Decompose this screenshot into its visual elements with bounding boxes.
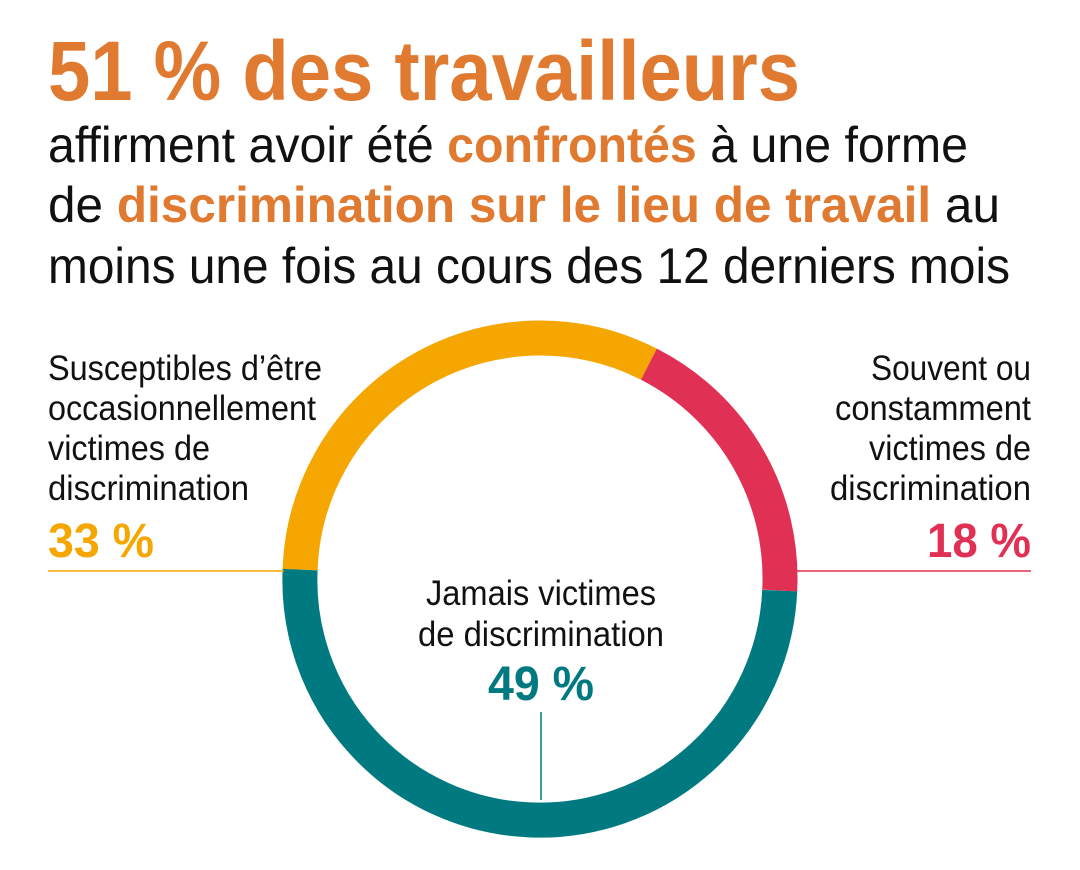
label: often: [830, 349, 1031, 568]
label: occasionally: discrimination: [48, 469, 249, 508]
leader line left: [48, 570, 284, 572]
label: occasionally: 33 %: [48, 515, 154, 568]
label: occasionally: Susceptibles d’être: [48, 349, 322, 388]
label: occasionally: victimes de: [48, 429, 210, 468]
donut chart: [300, 338, 780, 820]
label: occasionally: occasionnellement: [48, 389, 316, 428]
label: often: victimes de: [869, 429, 1031, 468]
label: never: [418, 574, 664, 711]
title: 51 % des travailleurs: [48, 24, 800, 118]
label: never: 49 %: [488, 658, 594, 711]
label: never: de discrimination: [418, 615, 664, 654]
label: often: discrimination: [830, 469, 1031, 508]
label: often: Souvent ou: [871, 349, 1031, 388]
leader line right: [797, 570, 1031, 572]
subtitle text block: moins une fois au cours des 12 derniers mois: [48, 238, 1010, 294]
segment: never 49%: [300, 570, 780, 820]
subtitle text block: de discrimination sur le lieu de travail au: [48, 177, 1000, 233]
segment: often 18%: [649, 364, 780, 591]
segment: occasionally 33%: [300, 338, 649, 570]
label: often: constamment: [835, 389, 1031, 428]
subtitle text block: affirment avoir été confrontés à une forme: [48, 117, 968, 173]
label: occasionally: [48, 349, 322, 568]
label: never: Jamais victimes: [426, 574, 656, 613]
leader line center: [540, 712, 542, 800]
subtitle text block: [48, 117, 1010, 294]
label: often: 18 %: [927, 515, 1031, 568]
